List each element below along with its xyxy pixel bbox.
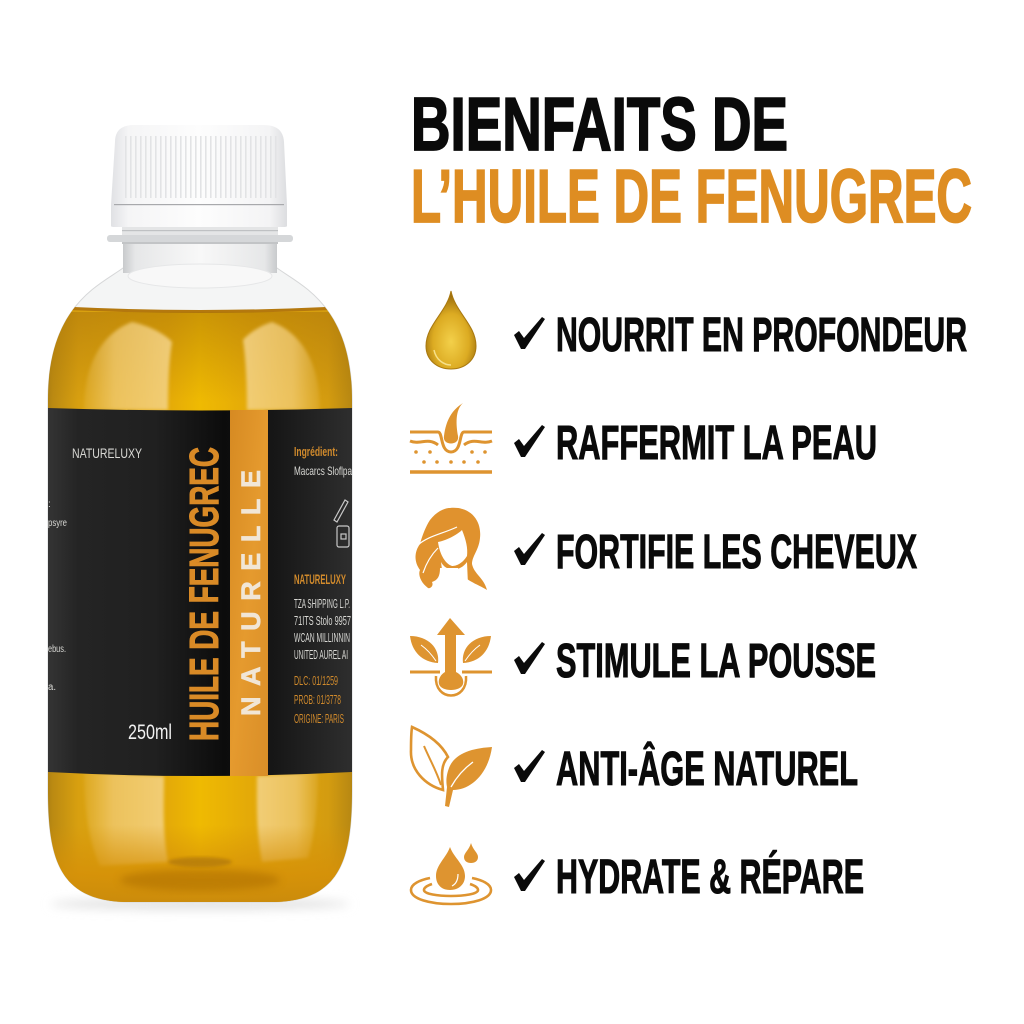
maker details: TZA SHIPPING L.P. [294,597,350,611]
maker details: UNITED AUREL AI [294,648,348,662]
highlights lower [84,772,318,866]
benefit: strengthens hair [416,508,917,590]
oil [40,307,360,908]
product name: HUILE DE FENUGREC [181,447,227,741]
benefit: firms skin [410,403,877,472]
wrapped label text: ebus. [48,644,66,655]
bottle neck [123,243,277,273]
maker details [294,571,351,726]
check [514,533,545,565]
cap [111,125,287,227]
bottle glass shoulder [48,268,352,902]
icon: woman hair [416,508,487,590]
maker details: PROB: 01/3778 [294,693,341,707]
benefit: hydrates and repairs [411,843,864,904]
maker details: WCAN MILLINNIN [294,631,350,645]
icon: leaves [411,727,492,807]
label [48,408,352,776]
wrapped label text: : [48,499,51,510]
icon: oil drop [426,291,476,369]
benefit: stimulates growth [410,618,876,696]
title [411,82,972,238]
check [514,425,545,457]
maker details: NATURELUXY [294,571,346,587]
benefit: nourishes [426,291,967,369]
maker details: 71ITS Stolo 9957 [294,614,351,628]
neck ring [107,226,293,288]
icon: growth arrow with leaves [410,618,492,696]
check [514,317,545,349]
title: BIENFAITS DE [411,82,788,166]
check [514,859,545,891]
check [514,750,545,782]
ingredients [294,444,352,478]
wrapped label text: psyre [48,518,67,529]
ingredients: Ingrédient: [294,444,338,459]
naturelle: NATURELLE [236,470,266,716]
wrapped label text [48,499,67,693]
wrapped label text: a. [48,682,56,693]
icon: skin and hair follicle [410,403,492,472]
maker details: ORIGINE: PARIS [294,712,344,726]
brand: NATURELUXY [72,445,142,461]
maker details: DLC: 01/1259 [294,674,338,688]
bottle shadow [50,898,350,910]
label orange band [230,410,268,776]
icon: water drops and ripples [411,843,491,904]
highlights upper [84,322,320,410]
benefit: natural anti-ageing [411,727,858,807]
label recycle icon [334,500,349,547]
text: ANTI-ÂGE NATUREL [556,741,858,796]
product bottle [40,125,360,910]
volume: 250ml [128,721,172,744]
ingredients: Macarcs Sloflpa [294,464,352,478]
check [514,642,545,674]
